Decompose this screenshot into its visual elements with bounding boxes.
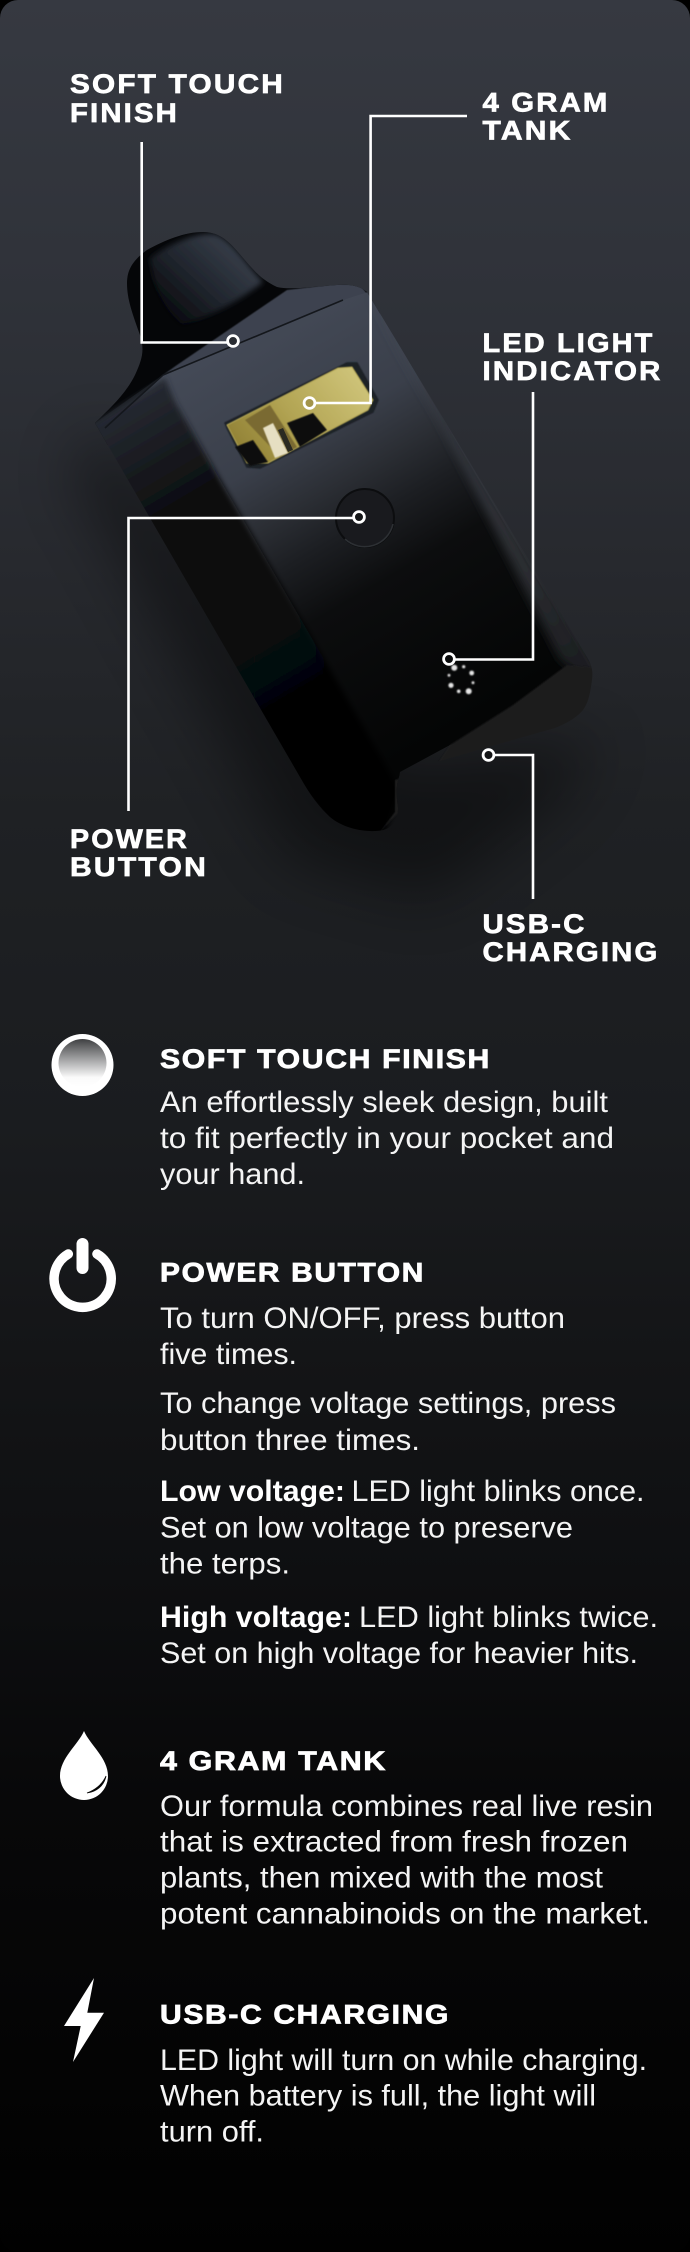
device mouthpiece xyxy=(90,225,380,445)
text block: USB-C charging: turn off. xyxy=(160,2116,264,2148)
text block: low voltage: Set on low voltage to preserve xyxy=(160,1512,573,1544)
text block: 4 gram tank: potent cannabinoids on the market. xyxy=(160,1898,650,1930)
label: soft touch finish xyxy=(70,69,285,128)
leader: 4 gram tank xyxy=(304,116,467,408)
section: 4 gram tank xyxy=(160,1746,653,1930)
text block: on/off: five times. xyxy=(160,1338,297,1371)
icon: lightning bolt xyxy=(64,1978,104,2062)
label: power button xyxy=(70,824,208,882)
section: USB-C charging xyxy=(160,2000,647,2148)
text block: soft touch finish: to fit perfectly in your pocket and xyxy=(160,1122,614,1155)
leader: power button xyxy=(128,512,364,811)
icon: power xyxy=(54,1238,111,1307)
LED ring xyxy=(448,665,474,694)
text block: low voltage: Low voltage: xyxy=(160,1475,345,1508)
text block: soft touch finish: An effortlessly sleek design, built xyxy=(160,1086,609,1119)
text block: high voltage xyxy=(160,1601,658,1670)
text block: USB-C charging: LED light will turn on while charging. xyxy=(160,2044,647,2077)
section: soft touch finish xyxy=(160,1044,614,1191)
label: 4 gram tank: TANK xyxy=(482,116,572,146)
heading: soft touch finish: SOFT TOUCH FINISH xyxy=(160,1044,491,1074)
text block: low voltage: LED light blinks once. xyxy=(352,1475,644,1508)
leader: soft touch finish xyxy=(142,142,238,346)
leader: USB-C charging xyxy=(483,750,533,899)
text block: USB-C charging: When battery is full, the light will xyxy=(160,2080,596,2112)
heading: 4 gram tank: 4 GRAM TANK xyxy=(160,1746,387,1776)
label: LED light indicator xyxy=(482,328,662,386)
tank window xyxy=(225,363,378,468)
text block: USB-C charging xyxy=(160,2044,647,2148)
label: USB-C charging: CHARGING xyxy=(482,937,660,967)
label: USB-C charging xyxy=(482,909,660,967)
leader: LED light indicator xyxy=(444,392,533,664)
label: LED light indicator: INDICATOR xyxy=(482,356,662,386)
device left facet xyxy=(90,378,400,840)
text block: 4 gram tank: plants, then mixed with the most xyxy=(160,1862,604,1894)
icon: soft touch orb xyxy=(52,1034,114,1096)
text block: on/off xyxy=(160,1302,565,1371)
label: 4 gram tank: 4 GRAM xyxy=(482,88,610,118)
text block: 4 gram tank: Our formula combines real live resin xyxy=(160,1790,653,1823)
heading: power button: POWER BUTTON xyxy=(160,1258,425,1288)
heading: USB-C charging: USB-C CHARGING xyxy=(160,2000,450,2030)
text block: high voltage: Set on high voltage for heavier hits. xyxy=(160,1637,638,1670)
device lower face xyxy=(380,665,600,832)
label: USB-C charging: USB-C xyxy=(482,909,586,939)
label: 4 gram tank xyxy=(482,88,610,146)
text block: on/off: To turn ON/OFF, press button xyxy=(160,1302,565,1335)
label: soft touch finish: SOFT TOUCH xyxy=(70,69,285,99)
device illustration xyxy=(70,225,600,900)
text block: voltage settings xyxy=(160,1387,616,1457)
text block: low voltage xyxy=(160,1475,644,1580)
text block: soft touch finish xyxy=(160,1086,614,1191)
device shadow xyxy=(70,430,600,900)
text block: high voltage: High voltage: xyxy=(160,1601,352,1634)
text block: soft touch finish: your hand. xyxy=(160,1158,305,1191)
section: power button xyxy=(160,1258,658,1670)
text block: 4 gram tank: that is extracted from fresh frozen xyxy=(160,1826,628,1858)
text block: low voltage: the terps. xyxy=(160,1548,290,1580)
label: soft touch finish: FINISH xyxy=(70,98,179,128)
text block: high voltage: LED light blinks twice. xyxy=(359,1601,658,1634)
device shoulder xyxy=(163,284,372,375)
text block: 4 gram tank xyxy=(160,1790,653,1930)
device right facet xyxy=(445,425,590,668)
device front face xyxy=(142,292,570,814)
text block: voltage settings: button three times. xyxy=(160,1424,420,1457)
label: power button: POWER xyxy=(70,824,189,854)
label: LED light indicator: LED LIGHT xyxy=(482,328,654,358)
device seam xyxy=(105,300,343,428)
text block: voltage settings: To change voltage settings, press xyxy=(160,1387,616,1420)
icon: droplet xyxy=(60,1731,108,1800)
label: power button: BUTTON xyxy=(70,852,208,882)
power button on device xyxy=(336,489,394,547)
